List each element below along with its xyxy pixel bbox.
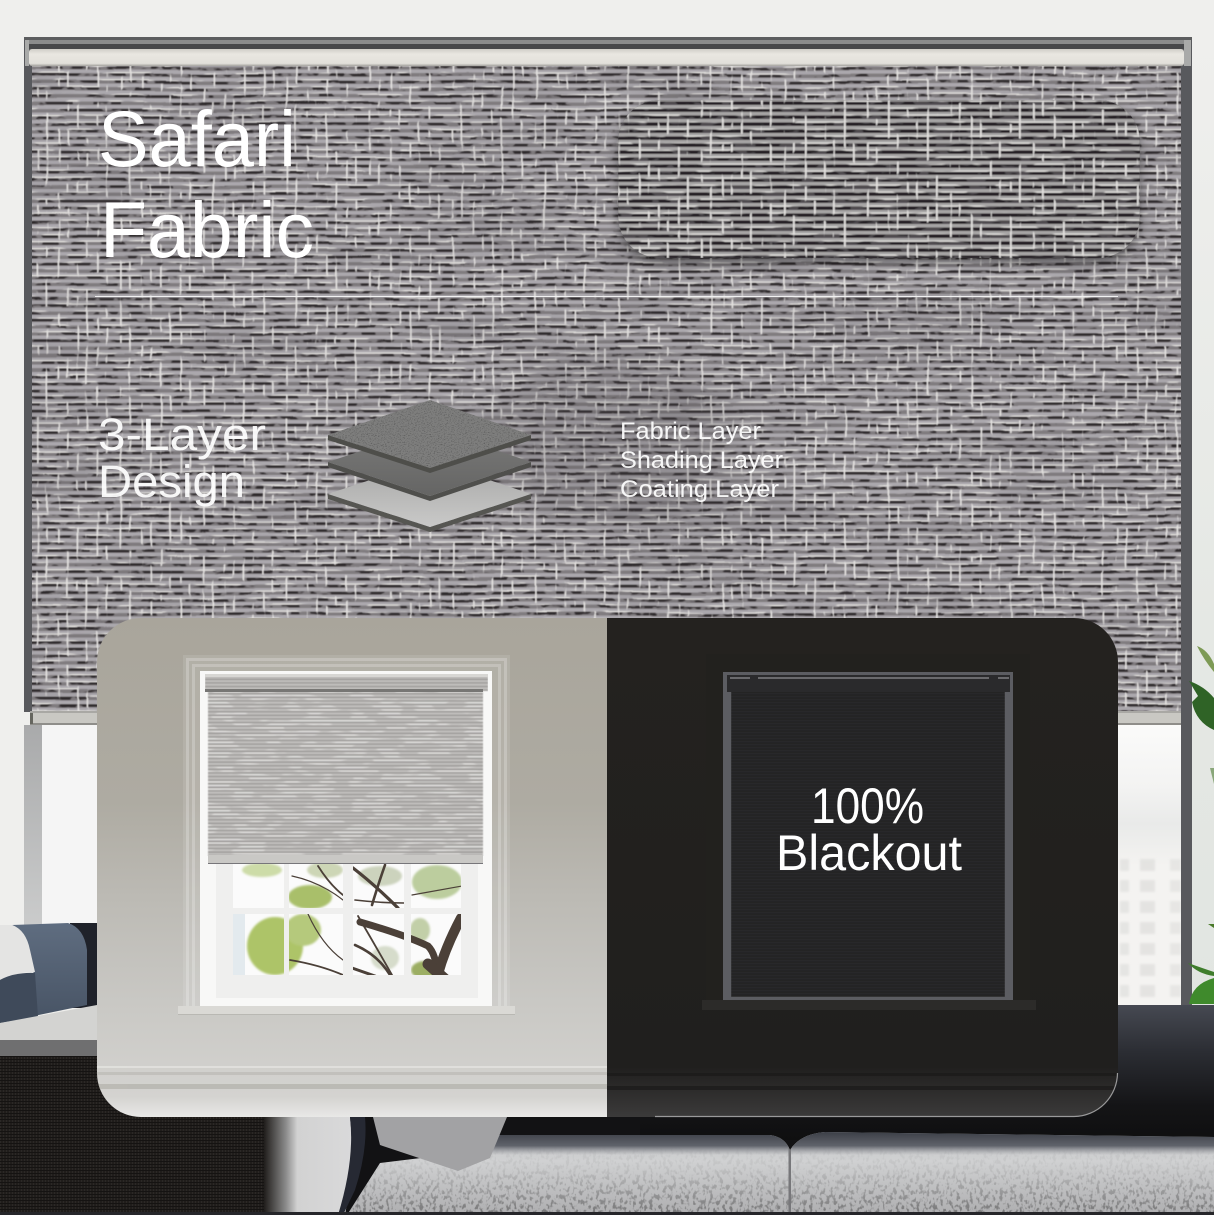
bottom rail	[30, 711, 1181, 725]
divider	[95, 296, 1118, 297]
headrail and roller	[24, 37, 1192, 66]
sofa armrest left	[0, 923, 100, 1056]
window glass right	[1118, 725, 1182, 1007]
roller shade fabric	[22, 56, 1191, 722]
fabric swatch	[618, 100, 1140, 258]
seat cushions	[340, 1130, 1214, 1215]
blackout label: Blackout	[776, 825, 962, 881]
layer labels: Fabric Layer	[620, 418, 761, 445]
plant	[1188, 646, 1214, 1004]
dark window frame	[702, 654, 1036, 1010]
window view tree	[233, 864, 461, 975]
icon: three layer stack	[328, 400, 531, 532]
sofa	[0, 923, 1214, 1215]
corner cushion	[264, 1117, 366, 1215]
panel edge highlight	[655, 1073, 1118, 1116]
light roller blind	[205, 674, 488, 864]
layer labels	[620, 418, 783, 503]
comparison panel	[97, 618, 1118, 1117]
blackout label: 100%	[811, 778, 924, 834]
subheading	[98, 409, 266, 507]
light window frame	[178, 655, 515, 1015]
blackout label	[780, 788, 962, 870]
panel: light room	[97, 618, 608, 1117]
subheading: Design	[98, 456, 245, 507]
bottom coating layer	[328, 460, 531, 532]
sofa back right	[640, 1005, 1214, 1140]
middle shading layer	[328, 428, 531, 501]
dark roller blind	[727, 675, 1010, 997]
layer labels: Coating Layer	[620, 476, 779, 503]
sofa back centre	[340, 1110, 1214, 1215]
panel: dark room	[607, 618, 1118, 1117]
title	[98, 94, 314, 274]
layer labels: Shading Layer	[620, 447, 783, 474]
side channels	[24, 40, 1192, 1008]
title: Safari	[98, 94, 296, 183]
top fabric layer	[328, 400, 531, 473]
window glass left	[24, 725, 98, 930]
sofa dark base	[0, 1054, 270, 1215]
subheading: 3-Layer	[98, 409, 266, 460]
title: Fabric	[100, 185, 314, 274]
throw pillow	[373, 1117, 507, 1171]
